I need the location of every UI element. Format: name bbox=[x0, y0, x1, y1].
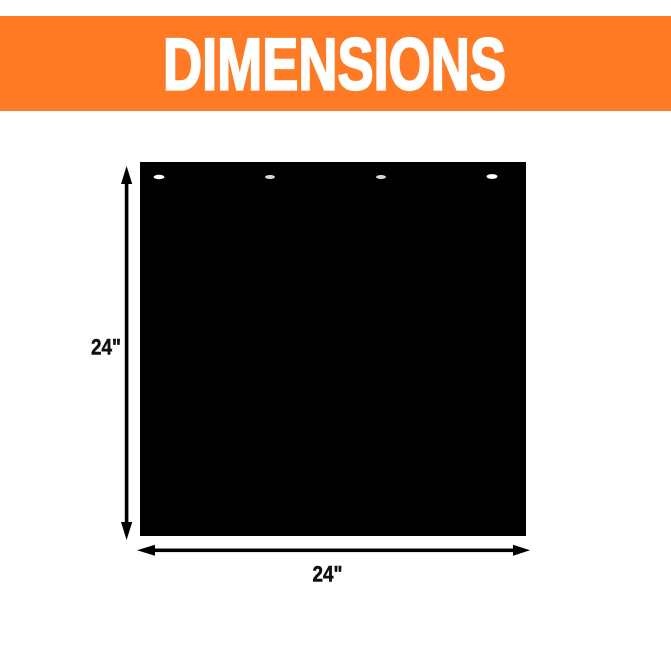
title: DIMENSIONS bbox=[163, 24, 506, 106]
label: height: 24" bbox=[91, 334, 121, 360]
label: width: 24" bbox=[312, 562, 342, 586]
icon: mounting hole 1 bbox=[154, 175, 164, 179]
icon: mounting hole 3 bbox=[376, 175, 386, 179]
panel: black square mat bbox=[140, 162, 526, 536]
icon: mounting hole 4 bbox=[486, 174, 498, 179]
arrow: horizontal dimension bbox=[137, 545, 530, 556]
icon: mounting hole 2 bbox=[265, 175, 275, 179]
arrow: vertical dimension bbox=[121, 166, 132, 540]
header banner bbox=[0, 16, 671, 111]
